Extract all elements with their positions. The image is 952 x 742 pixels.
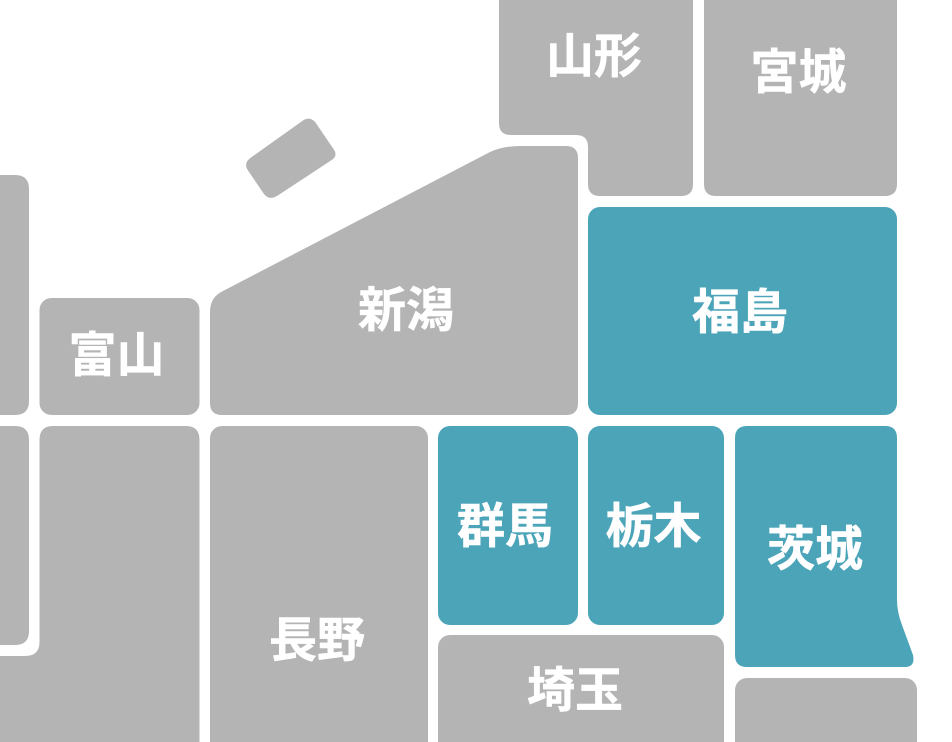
prefecture: Yamagata [499, 0, 693, 196]
prefecture: Gifu [0, 426, 200, 742]
prefecture: Miyagi [704, 0, 897, 196]
prefecture: Ishikawa (cropped) [0, 175, 29, 415]
prefecture: Nagano [210, 426, 428, 742]
island: Sado [246, 119, 336, 198]
prefecture: Tochigi [588, 426, 724, 625]
prefecture: Miyagi: 宮城 [750, 46, 847, 100]
prefecture: Gunma: 群馬 [457, 500, 553, 554]
prefecture: Fukushima: 福島 [692, 286, 788, 340]
prefecture: Toyama: 富山 [68, 330, 165, 382]
prefecture: Chiba (cropped) [735, 678, 917, 742]
prefecture: Nagano: 長野 [269, 614, 365, 668]
prefecture: Toyama [40, 298, 200, 415]
prefecture: Fukushima [588, 207, 897, 415]
prefecture: Yamagata: 山形 [546, 30, 642, 84]
prefecture: Niigata: 新潟 [358, 284, 454, 338]
prefecture: Ibaraki [735, 426, 913, 667]
prefecture: Niigata [210, 146, 578, 415]
prefecture: Saitama: 埼玉 [527, 664, 623, 718]
prefecture: Gunma [438, 426, 578, 625]
prefecture: Tochigi: 栃木 [605, 500, 702, 554]
prefecture: Fukui (cropped) [0, 426, 29, 645]
prefecture: Ibaraki: 茨城 [767, 524, 863, 576]
prefecture: Saitama [438, 635, 724, 742]
